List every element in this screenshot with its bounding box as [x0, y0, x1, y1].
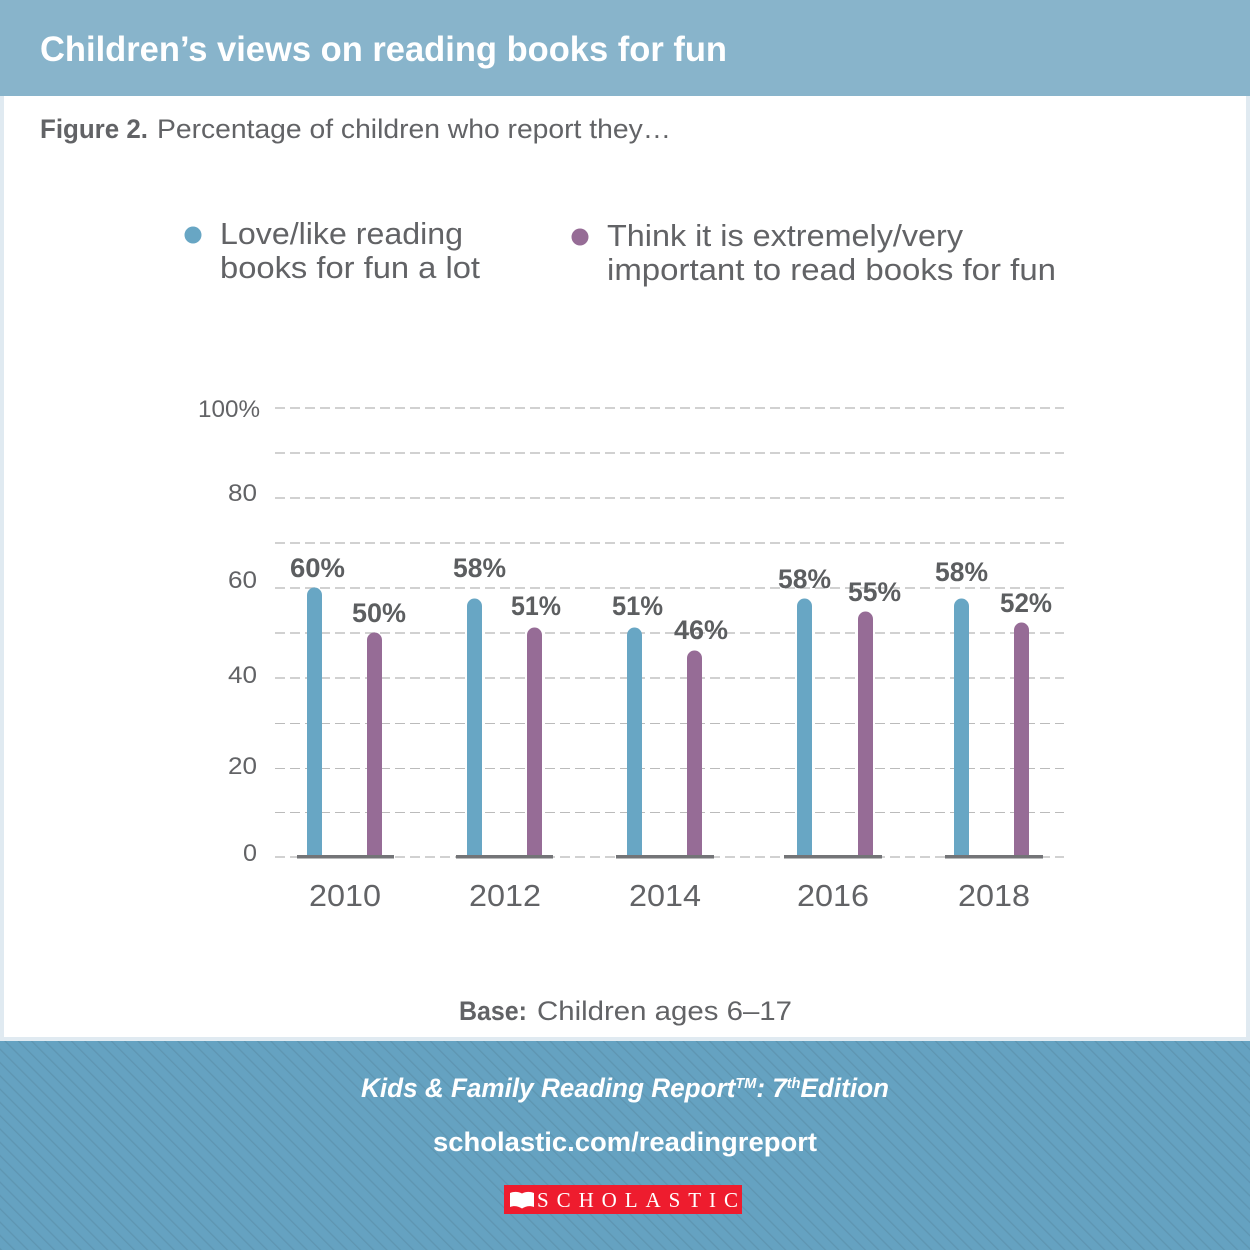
panel: white chart card: [4, 96, 1246, 1037]
chart: y axis labels: 40: [228, 662, 257, 689]
group 2010: 60%: [290, 553, 345, 583]
group 2018: 2018: [958, 878, 1030, 913]
group 2014: 46%: [674, 615, 728, 645]
report title: th: [787, 1075, 801, 1092]
icon: open book: [510, 1192, 534, 1208]
group 2010: 2010: [309, 878, 381, 913]
title: Children’s views on reading books for fun: [40, 30, 727, 69]
group 2016: 55%: [848, 577, 901, 607]
legend: love/like reading: books for fun a lot: [220, 250, 480, 285]
figure caption: Figure 2.: [40, 114, 148, 144]
header band: [0, 0, 1250, 96]
group 2010: [290, 553, 406, 913]
legend: think it is important: important to read books for fun: [607, 252, 1056, 287]
chart: y axis labels: 100%: [198, 396, 260, 423]
logo: Scholastic: [504, 1185, 742, 1214]
logo: Scholastic: SCHOLASTIC: [537, 1188, 738, 1212]
report title: Edition: [801, 1073, 889, 1103]
group 2014: 51%: [612, 591, 663, 621]
footer band: [0, 1041, 1250, 1250]
group 2016: 58%: [778, 564, 831, 594]
chart: grid lines: [275, 408, 1064, 857]
chart: y axis labels: [198, 396, 260, 867]
legend: think it is important: Think it is extremely/very: [607, 218, 964, 253]
group 2012: [453, 553, 561, 913]
chart: y axis labels: 60: [228, 567, 257, 594]
group 2016: [778, 564, 901, 913]
chart: y axis labels: 80: [228, 480, 257, 507]
chart: y axis labels: 20: [228, 753, 257, 780]
group 2012: 58%: [453, 553, 506, 583]
website: scholastic.com/readingreport: [433, 1127, 817, 1157]
base note: Base:: [459, 996, 527, 1026]
group 2018: 58%: [935, 557, 988, 587]
group 2016: 2016: [797, 878, 869, 913]
group 2012: 51%: [511, 591, 561, 621]
group 2014: [612, 591, 728, 913]
group 2010: 50%: [352, 598, 406, 628]
group 2014: 2014: [629, 878, 701, 913]
figure caption: Percentage of children who report they…: [157, 114, 671, 144]
chart: y axis labels: 0: [243, 840, 257, 867]
legend: love/like reading: Love/like reading: [220, 216, 463, 251]
report title: Kids & Family Reading Report: [361, 1073, 748, 1103]
report title: : 7: [756, 1073, 789, 1103]
base note: Children ages 6–17: [537, 996, 792, 1026]
report title: TM: [735, 1075, 757, 1092]
legend: love/like reading: [184, 216, 480, 285]
legend: think it is important: [572, 218, 1056, 287]
group 2012: 2012: [469, 878, 541, 913]
group 2018: [935, 557, 1052, 913]
group 2018: 52%: [1000, 588, 1052, 618]
